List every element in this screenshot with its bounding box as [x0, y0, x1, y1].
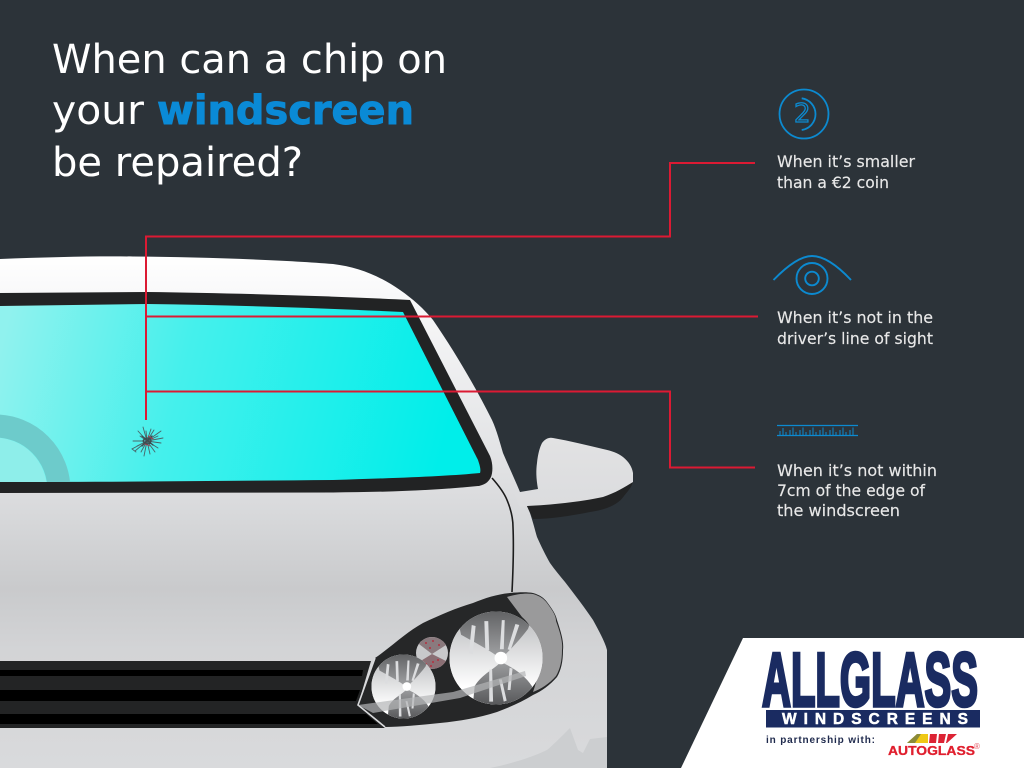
- car body: [0, 256, 607, 768]
- steering wheel: [0, 414, 70, 482]
- block: coin text: [777, 152, 915, 192]
- wing mirror: [514, 438, 633, 519]
- red callout lines: [146, 163, 758, 468]
- title: windscreen: [157, 88, 414, 134]
- logo: Autoglass: ®: [974, 742, 980, 751]
- block: edge distance text: 7cm of the edge of: [777, 481, 925, 500]
- logo panel: [681, 638, 1024, 768]
- large headlamp lens: [449, 600, 543, 706]
- block: coin text: When it’s smaller: [777, 152, 915, 171]
- title: [52, 37, 447, 186]
- icon: 2 euro coin: 2: [794, 99, 811, 129]
- windscreen frame: [0, 292, 492, 493]
- partnership text: in partnership with:: [766, 735, 875, 746]
- grille: [0, 661, 385, 728]
- door shut line: [492, 478, 513, 592]
- block: line of sight text: driver’s line of sight: [777, 329, 933, 348]
- block: edge distance text: the windscreen: [777, 501, 900, 520]
- icon: 2 euro coin: [780, 90, 828, 138]
- logo: windscreens bar: WINDSCREENS: [782, 711, 968, 728]
- callout line: line of sight: [146, 316, 758, 318]
- headlight: [358, 592, 563, 727]
- block: line of sight text: When it’s not in the: [777, 308, 933, 327]
- callout line: coin size: [146, 163, 755, 420]
- amber lamp: [416, 637, 448, 669]
- icon: ruler: [777, 426, 858, 436]
- block: edge distance text: [777, 461, 937, 520]
- chrome edge: [358, 658, 385, 727]
- headlight grey housing: [507, 594, 562, 692]
- small headlamp lens: [371, 646, 436, 720]
- bumper shading: [490, 728, 607, 768]
- logo: Autoglass: AUTOGLASS: [888, 744, 975, 758]
- car illustration: [0, 256, 633, 768]
- logo: Autoglass: [888, 734, 980, 758]
- callout line: edge distance: [146, 392, 755, 468]
- block: edge distance text: When it’s not within: [777, 461, 937, 480]
- title: be repaired?: [52, 140, 303, 186]
- block: line of sight text: [777, 308, 933, 348]
- windscreen glass: [0, 304, 480, 482]
- headlight reflection band: [358, 671, 526, 713]
- chip crack: [132, 427, 163, 456]
- title: When can a chip on: [52, 37, 447, 83]
- icon: eye: [774, 256, 851, 294]
- title: your: [52, 88, 145, 134]
- block: coin text: than a €2 coin: [777, 173, 889, 192]
